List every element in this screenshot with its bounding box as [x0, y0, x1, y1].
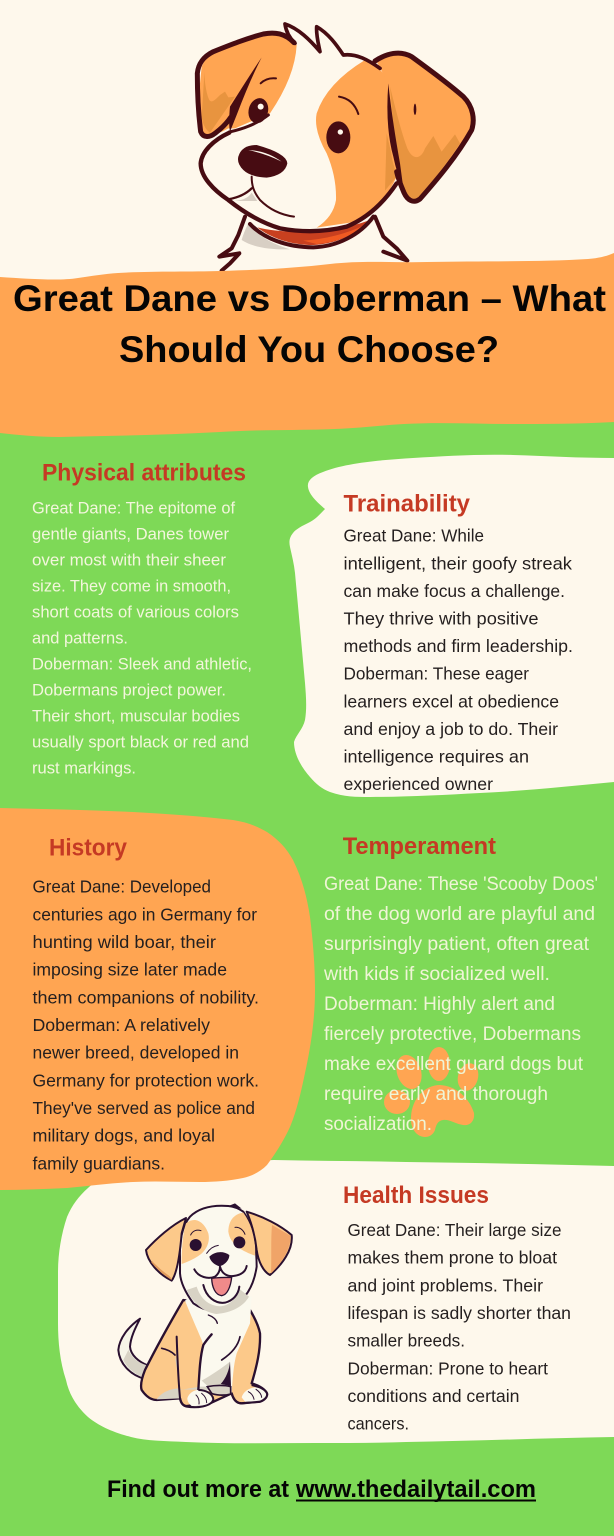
panel: physical attributes — [32, 460, 252, 778]
text block: temperament: Great Dane: These 'Scooby Doos' — [324, 874, 598, 895]
text block: trainability — [344, 526, 573, 794]
text block: physical attributes: gentle giants, Danes tower — [32, 525, 230, 543]
text block: history: them companions of nobility. — [32, 987, 259, 1007]
text block: trainability: Great Dane: While — [344, 526, 484, 546]
text block: trainability: intelligent, their goofy streak — [344, 553, 572, 573]
text block: health issues: smaller breeds. — [348, 1331, 465, 1351]
text block: trainability: Doberman: These eager — [344, 664, 529, 684]
heading: temperament: Temperament — [343, 833, 496, 860]
text block: health issues: cancers. — [348, 1414, 409, 1434]
text block: history: family guardians. — [32, 1153, 165, 1173]
text block: physical attributes: Dobermans project power. — [32, 682, 226, 700]
text block: history: newer breed, developed in — [32, 1043, 239, 1063]
text block: history: imposing size later made — [32, 960, 227, 980]
text block: health issues: conditions and certain — [348, 1386, 520, 1406]
text block: temperament: socialization. — [324, 1114, 432, 1135]
text block: history: Germany for protection work. — [32, 1070, 259, 1090]
panel: health issues text — [343, 1182, 571, 1434]
text block: history — [32, 877, 259, 1173]
icon: dog head illustration — [197, 24, 473, 271]
text block: trainability: can make focus a challenge. — [344, 581, 565, 601]
heading: physical attributes: Physical attributes — [42, 460, 246, 486]
panel: orange title band — [0, 253, 614, 437]
panel: temperament — [323, 833, 598, 1137]
footer call to action: Find out more at — [107, 1476, 289, 1503]
title — [13, 278, 606, 370]
text block: temperament: of the dog world are playful and — [324, 904, 595, 925]
text block: physical attributes: short coats of various colors — [32, 603, 239, 621]
text block: temperament: surprisingly patient, often great — [324, 934, 590, 955]
text block: temperament: fiercely protective, Dobermans — [324, 1024, 581, 1045]
panel: trainability — [289, 455, 614, 797]
text block: history: Doberman: A relatively — [32, 1015, 210, 1035]
text block: trainability: They thrive with positive — [344, 608, 538, 628]
text block: health issues: and joint problems. Their — [348, 1275, 543, 1295]
panel shape: trainability — [289, 455, 614, 797]
text block: physical attributes: size. They come in smooth, — [32, 577, 231, 595]
text block: physical attributes — [32, 499, 252, 778]
text block: health issues: Great Dane: Their large size — [348, 1220, 562, 1240]
text block: history: centuries ago in Germany for — [32, 904, 257, 924]
text block: history: military dogs, and loyal — [32, 1126, 215, 1146]
heading: trainability: Trainability — [344, 491, 470, 518]
text block: physical attributes: over most with their sheer — [32, 551, 227, 569]
text block: health issues: Doberman: Prone to heart — [348, 1358, 548, 1378]
text block: health issues — [348, 1220, 571, 1434]
text block: history: Great Dane: Developed — [32, 877, 211, 897]
panel shape: history — [0, 808, 315, 1190]
footer call to action: www.thedailytail.com — [295, 1476, 536, 1503]
heading: health issues: Health Issues — [343, 1182, 489, 1209]
text block: trainability: and enjoy a job to do. Their — [344, 719, 558, 739]
heading: history: History — [49, 835, 127, 862]
text block: temperament: require early and thorough — [324, 1084, 548, 1105]
text block: physical attributes: Doberman: Sleek and athletic, — [32, 655, 252, 673]
text block: physical attributes: usually sport black or red and — [32, 734, 249, 752]
text block: health issues: makes them prone to bloat — [348, 1248, 557, 1268]
title: Should You Choose? — [119, 329, 499, 370]
panel: green page background — [0, 400, 614, 1536]
text block: temperament: make excellent guard dogs but — [324, 1054, 584, 1075]
text block: trainability: intelligence requires an — [344, 747, 529, 767]
text block: trainability: experienced owner — [344, 774, 493, 794]
icon: orange paw print — [384, 1047, 481, 1137]
panel: health issues shape — [58, 1160, 614, 1443]
text block: temperament: with kids if socialized well. — [323, 964, 550, 985]
text block: health issues: lifespan is sadly shorter than — [348, 1303, 571, 1323]
text block: trainability: learners excel at obedience — [344, 691, 559, 711]
footer call to action — [107, 1476, 536, 1503]
text block: temperament: Doberman: Highly alert and — [324, 994, 555, 1015]
text block: physical attributes: Their short, muscular bodies — [32, 708, 240, 726]
panel: history — [0, 808, 315, 1190]
icon: sitting puppy illustration — [118, 1203, 292, 1407]
panel: cream header background — [0, 0, 614, 300]
text block: physical attributes: rust markings. — [32, 760, 136, 778]
text block: history: hunting wild boar, their — [32, 932, 216, 952]
text block: temperament — [323, 874, 598, 1135]
text block: history: They've served as police and — [32, 1098, 255, 1118]
title: Great Dane vs Doberman – What — [13, 278, 606, 319]
text block: trainability: methods and firm leadership. — [344, 636, 573, 656]
text block: physical attributes: Great Dane: The epitome of — [32, 499, 235, 517]
text block: physical attributes: and patterns. — [32, 629, 128, 647]
